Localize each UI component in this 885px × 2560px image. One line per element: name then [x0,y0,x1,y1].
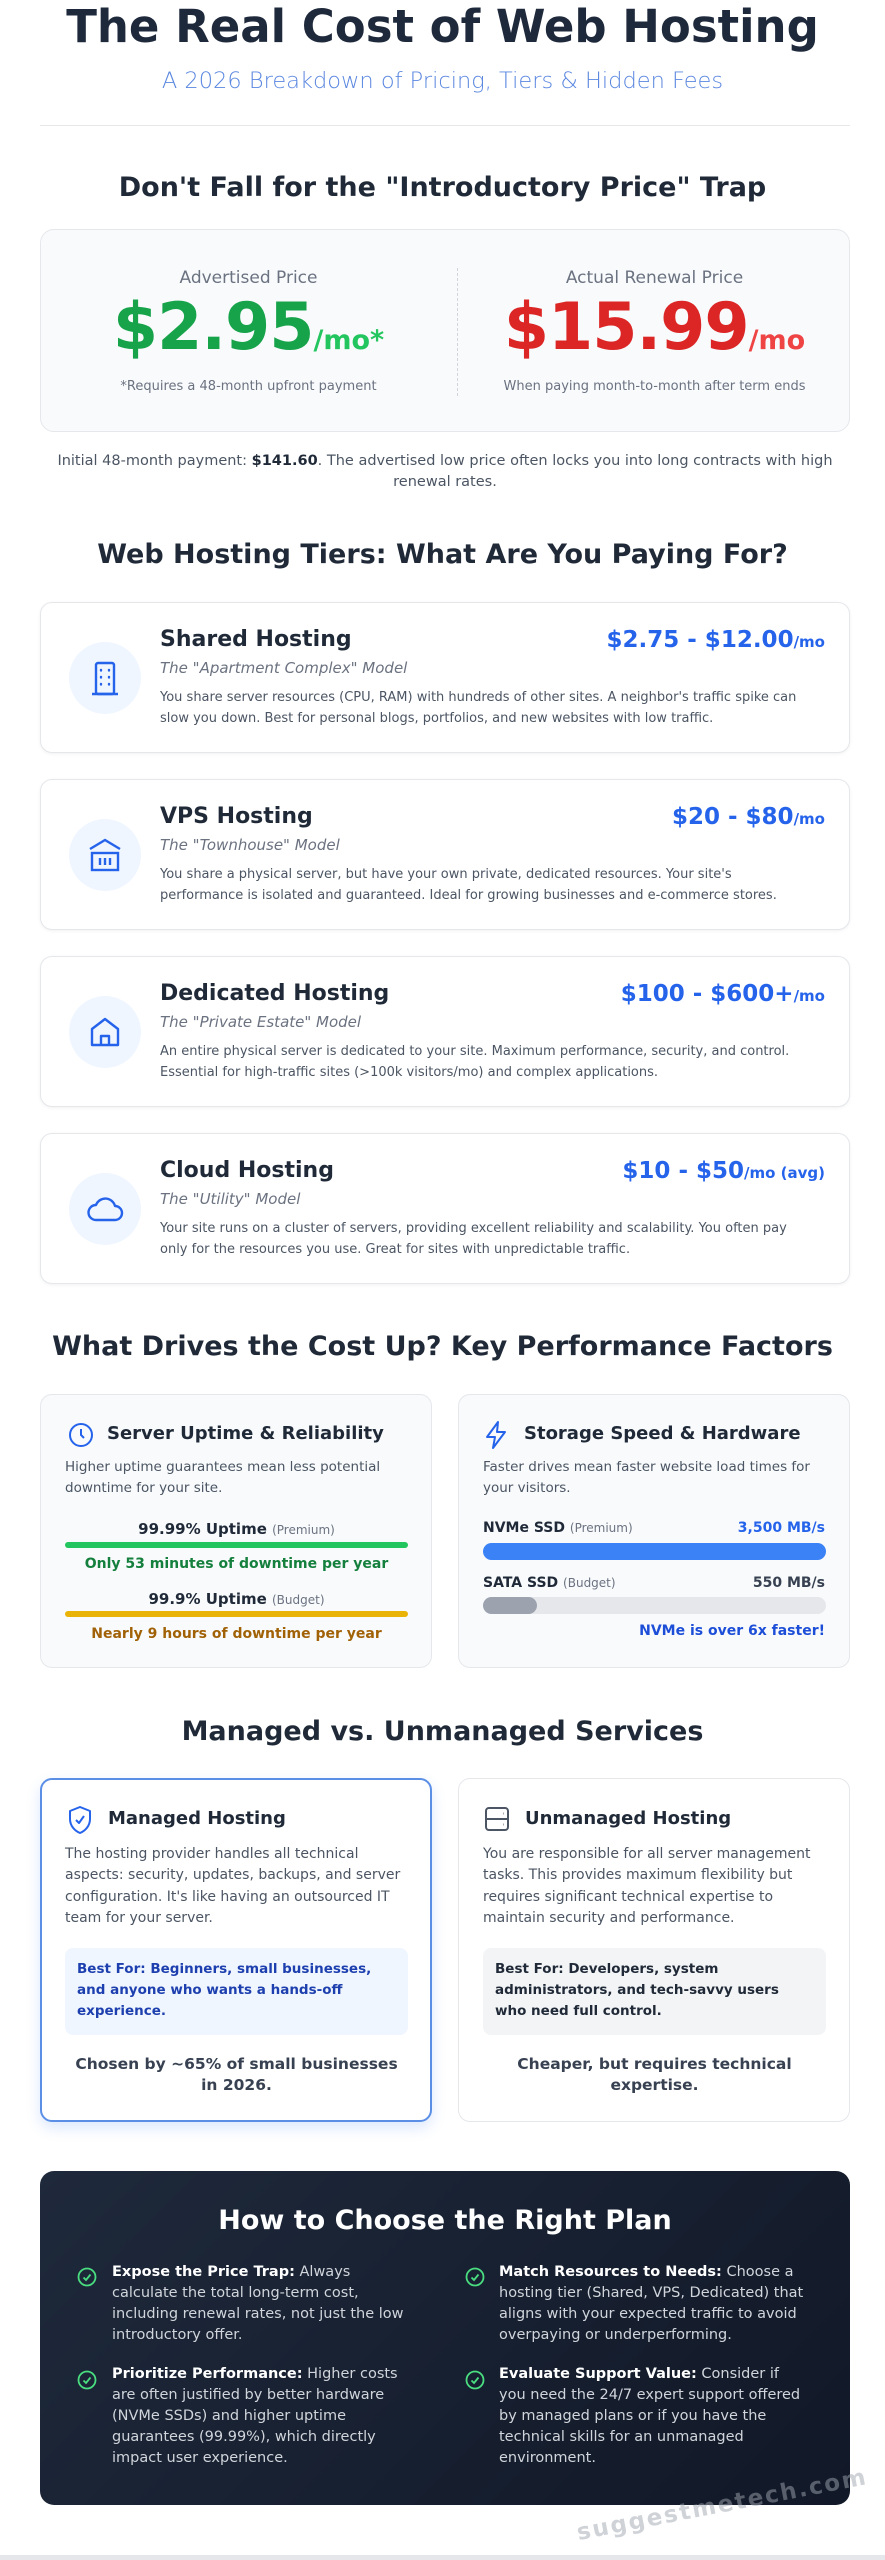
panel: how to choose: Expose the Price Trap: Always calculate the total long-term cost, including renewal rates, not just the low introductory offer. [112,2264,404,2343]
panel: how to choose [40,2171,850,2505]
card: vps hosting: VPS Hosting [160,804,313,829]
card: vps hosting: The "Townhouse" Model [160,836,340,854]
panel: managed: Chosen by ~65% of small businesses in 2026. [75,2055,398,2094]
panel: unmanaged [458,1778,850,2122]
advertised price: *Requires a 48-month upfront payment [120,379,377,394]
sata bar: SATA SSD (Budget) [483,1575,616,1591]
panel: managed: Managed Hosting [108,1808,286,1829]
card: cloud hosting [40,1133,850,1284]
panel: how to choose: Prioritize Performance: Higher costs are often justified by better hardware (NVMe SSDs) and higher uptime guarantees (99.99%), which directly impact user experience. [112,2366,398,2466]
card: dedicated hosting: An entire physical server is dedicated to your site. Maximum performance, security, and control. Essential for high-traffic sites (>100k visitors/mo) and complex applications. [160,1044,789,1080]
panel: storage speed: Storage Speed & Hardware [524,1423,801,1444]
tip: performance [78,2366,398,2466]
icon: cloud [69,1173,141,1245]
icon: townhouse [69,819,141,891]
panel: managed [40,1778,432,2122]
panel: storage speed [458,1394,850,1668]
heading: price trap: Don't Fall for the "Introductory Price" Trap [119,172,766,203]
panel: uptime: Higher uptime guarantees mean less potential downtime for your site. [65,1459,380,1496]
renewal price: Actual Renewal Price [566,268,743,288]
icon: shield [69,1806,91,1834]
tip: price trap [78,2264,404,2343]
icon: building [69,642,141,714]
card: cloud hosting: Your site runs on a cluster of servers, providing excellent reliability and scalability. You often pay only for the resources you use. Great for sites with unpredictable traffic. [160,1221,787,1257]
panel: storage speed: NVMe is over 6x faster! [639,1623,825,1639]
renewal price [504,268,805,394]
nvme bar: NVMe SSD (Premium) [483,1520,633,1536]
tip: support [466,2366,800,2466]
icon: bolt [486,1421,506,1449]
panel: how to choose: Evaluate Support Value: Consider if you need the 24/7 expert support offered by managed plans or if you have the technical skills for an unmanaged environment. [499,2366,800,2466]
icon: house [69,996,141,1068]
subtitle: A 2026 Breakdown of Pricing, Tiers & Hidden Fees [162,68,723,94]
title: The Real Cost of Web Hosting [66,0,819,53]
card: cloud hosting: Cloud Hosting [160,1158,334,1183]
card: dedicated hosting [40,956,850,1107]
card: cloud hosting: The "Utility" Model [160,1190,300,1208]
best for box [65,1948,408,2035]
card: shared hosting: $2.75 - $12.00/mo [606,627,825,653]
card: shared hosting: The "Apartment Complex" Model [160,659,407,677]
best for box [483,1948,826,2035]
premium uptime: 99.99% Uptime (Premium) [138,1520,335,1538]
watermark: suggestmetech.com [575,2464,870,2546]
tip: resources [466,2264,803,2343]
card: shared hosting: You share server resources (CPU, RAM) with hundreds of other sites. A neighbor's traffic spike can slow you down. Best for personal blogs, portfolios, and new websites with low traffic. [160,690,796,726]
heading: tiers: Web Hosting Tiers: What Are You Paying For? [97,539,788,570]
panel: storage speed: 550 MB/s [753,1575,825,1591]
card: dedicated hosting: $100 - $600+/mo [621,981,825,1007]
budget uptime: 99.9% Uptime (Budget) [148,1590,325,1608]
advertised price [113,268,384,394]
card: shared hosting: Shared Hosting [160,627,352,652]
renewal price: When paying month-to-month after term ends [504,379,805,394]
card: dedicated hosting: The "Private Estate" Model [160,1013,361,1031]
panel: storage speed: 3,500 MB/s [738,1520,825,1536]
panel: unmanaged: You are responsible for all server management tasks. This provides maximum flexibility but requires significant technical expertise to maintain security and performance. [483,1846,810,1926]
panel: uptime: Only 53 minutes of downtime per year [85,1556,388,1572]
card: vps hosting [40,779,850,930]
icon: clock [69,1423,93,1447]
panel: unmanaged: Unmanaged Hosting [525,1808,731,1829]
icon: server [485,1807,509,1831]
best for box: Best For: Beginners, small businesses, and anyone who wants a hands-off experience. [77,1961,371,2019]
card: vps hosting: You share a physical server, but have your own private, dedicated resources. Your site's performance is isolated and guaranteed. Ideal for growing businesses and e-commerce stores. [160,867,777,903]
card: shared hosting [40,602,850,753]
advertised price: $2.95/mo* [113,290,384,365]
card: cloud hosting: $10 - $50/mo (avg) [622,1158,825,1184]
panel: uptime: Server Uptime & Reliability [107,1423,384,1444]
best for box: Best For: Developers, system administrators, and tech-savvy users who need full control. [495,1961,779,2019]
advertised price: Advertised Price [179,268,318,288]
card: vps hosting: $20 - $80/mo [672,804,825,830]
panel: storage speed: Faster drives mean faster website load times for your visitors. [483,1459,810,1496]
panel: unmanaged: Cheaper, but requires technical expertise. [517,2055,792,2094]
panel: uptime: Nearly 9 hours of downtime per year [91,1626,382,1642]
heading: performance factors: What Drives the Cost Up? Key Performance Factors [52,1331,833,1362]
panel: managed: The hosting provider handles all technical aspects: security, updates, backups, and server configuration. It's like having an outsourced IT team for your server. [65,1846,400,1926]
panel: uptime [40,1394,432,1668]
note: initial payment: Initial 48-month payment: $141.60. The advertised low price often locks you into long contracts with high renewal rates. [57,453,833,490]
heading: managed vs unmanaged: Managed vs. Unmanaged Services [182,1716,703,1747]
heading: How to Choose the Right Plan [218,2205,672,2236]
panel: how to choose: Match Resources to Needs: Choose a hosting tier (Shared, VPS, Dedicated) that aligns with your expected traffic to avoid overpaying or underperforming. [499,2264,803,2343]
card: dedicated hosting: Dedicated Hosting [160,981,389,1006]
renewal price: $15.99/mo [504,290,805,365]
panel: price comparison [40,229,850,432]
